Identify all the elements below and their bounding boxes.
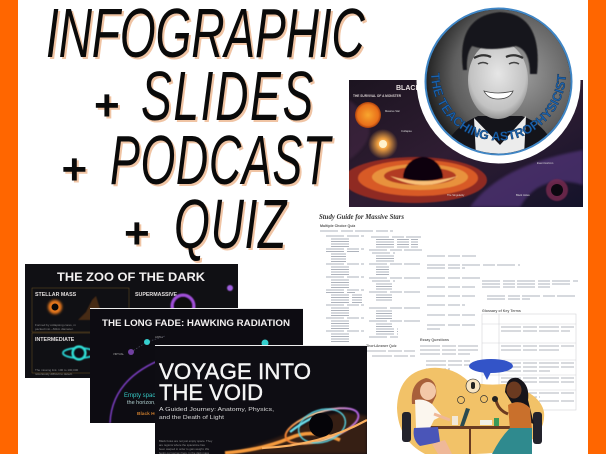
icon: stellar black hole xyxy=(48,300,62,314)
title: main lettering: PODCAST xyxy=(110,122,333,199)
slide: Voyage Into the Void: and the Death of Light xyxy=(159,415,224,421)
title: shadow layer xyxy=(48,0,368,265)
orange side border: right xyxy=(588,0,606,454)
table xyxy=(429,426,519,454)
slide: The Zoo of the Dark: The missing link. 100 to 100,000 xyxy=(35,368,79,372)
slide: The Zoo of the Dark: notoriously difficult to detect. xyxy=(35,372,73,376)
study guide document xyxy=(319,214,578,410)
slide: Voyage Into the Void: THE VOID xyxy=(159,380,263,405)
infographic poster: black holes: Massive Star xyxy=(385,109,400,113)
slide: The Zoo of the Dark: packed into ~60km diameter. xyxy=(35,327,74,331)
slide: The Long Fade xyxy=(90,308,303,423)
slide: The Zoo of the Dark: Formed by collapsing cores, m xyxy=(35,323,76,327)
title: shadow layer: SLIDES xyxy=(143,58,315,137)
slide: The Long Fade: Empty space i xyxy=(124,393,162,399)
black hole with flare xyxy=(225,401,367,454)
slide: The Zoo of the Dark xyxy=(25,264,238,378)
body copy: been warped in order to gain weight. We xyxy=(159,447,210,451)
title: shadow layer: + xyxy=(96,83,122,132)
heading: glossary: Glossary of Key Terms xyxy=(482,309,521,313)
infographic poster: black holes: Black Holes xyxy=(516,193,530,197)
study guide document: Study Guide for Massive Stars xyxy=(319,214,404,221)
black hole with accretion disc xyxy=(343,157,487,203)
headline: VOYAGE INTO xyxy=(159,359,311,384)
yellow blob xyxy=(397,368,544,454)
tablet and desk objects xyxy=(452,408,499,426)
icon: small distant black hole xyxy=(546,179,568,201)
subtitle: A Guided Journey: Anatomy, Physics, xyxy=(159,407,274,413)
title: shadow layer: PODCAST xyxy=(112,124,335,201)
title: main lettering: + xyxy=(124,209,150,258)
glossary table xyxy=(482,314,576,410)
title: main lettering: + xyxy=(62,145,87,194)
body copy: Black holes are not just empty space. They xyxy=(159,439,213,443)
title: main lettering: SLIDES xyxy=(141,56,313,135)
title: main lettering xyxy=(46,0,366,263)
podcast illustration xyxy=(397,359,544,454)
icon: supermassive black hole xyxy=(170,284,234,308)
title: shadow layer: + xyxy=(64,147,89,196)
slide: The Zoo of the Dark: INTERMEDIATE xyxy=(35,337,75,343)
icon: intermediate black hole xyxy=(63,346,95,360)
icon: particle cyan xyxy=(144,339,150,345)
infographic poster: black holes: The Singularity xyxy=(447,193,465,197)
infographic poster: black holes: BLACK xyxy=(396,85,420,92)
icon: red giant star xyxy=(355,102,381,128)
icon: microphone xyxy=(466,379,480,393)
slide: Voyage Into the Void xyxy=(155,344,367,454)
icon: smile right xyxy=(480,396,488,402)
body copy xyxy=(159,439,213,454)
infographic poster: black holes: Event Horizon xyxy=(537,161,554,165)
quiz column lines xyxy=(320,231,578,342)
infographic poster: black holes: Collapse xyxy=(401,129,412,133)
slide: The Long Fade: Black Ho xyxy=(137,411,158,417)
title: shadow layer: + xyxy=(126,211,152,260)
slide: The Long Fade: THE LONG FADE: HAWKING RADIATION xyxy=(102,318,290,328)
icon: particle purple xyxy=(128,349,134,355)
icon: smile left xyxy=(458,396,464,404)
infographic poster: black holes xyxy=(343,80,583,207)
blue speech bubble xyxy=(469,359,513,380)
slide: The Long Fade: VIRTUAL xyxy=(113,352,124,356)
slide: The Zoo of the Dark: STELLAR MASS xyxy=(35,292,77,298)
infographic poster: black holes: THE SURVIVAL OF A MONSTER xyxy=(353,94,402,98)
left woman xyxy=(402,378,452,454)
badge lettering: THE TEACHING ASTROPHYSICIST xyxy=(430,72,566,141)
orange side border: left xyxy=(0,0,18,454)
icon: supernova xyxy=(368,129,398,159)
title: main lettering: QUIZ xyxy=(174,184,288,263)
heading: essay questions: Essay Questions xyxy=(420,338,449,342)
body copy: are regions where the spacetime has xyxy=(159,443,205,447)
slide: The Long Fade: ANTI-x xyxy=(155,335,164,339)
portrait badge: The Teaching Astrophysicist xyxy=(416,8,580,164)
title: shadow layer: QUIZ xyxy=(176,186,290,265)
slide: The Long Fade: the horizon, t xyxy=(127,400,159,406)
title: main lettering: + xyxy=(94,81,120,130)
slide: The Zoo of the Dark: SUPERMASSIVE xyxy=(135,292,178,298)
slide: The Zoo of the Dark: THE ZOO OF THE DARK xyxy=(57,272,206,284)
study guide document: Multiple Choice Quiz xyxy=(320,224,356,228)
heading: short-answer quiz: Short-Answer Quiz xyxy=(366,344,397,348)
right woman xyxy=(492,378,542,454)
